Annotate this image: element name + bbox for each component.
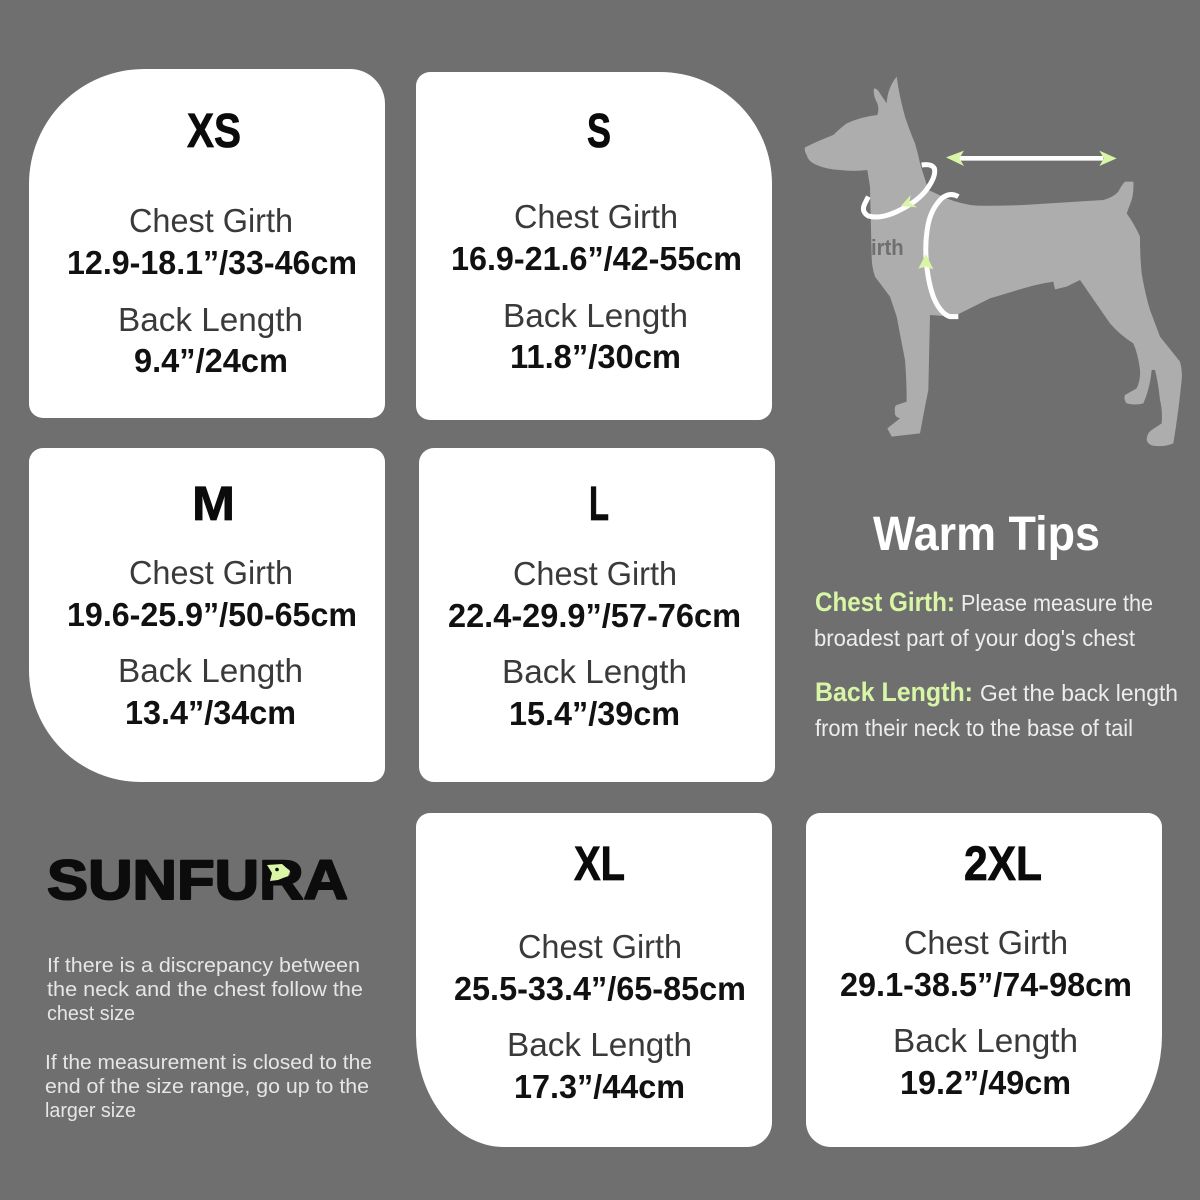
icon: neck arrow head (901, 195, 917, 207)
label: chest girth: Chest Girth (513, 555, 677, 592)
text block: back length tip: from their neck to the base of tail (815, 715, 1133, 741)
label: chest girth: Chest Girth (904, 924, 1068, 961)
label: back length: Back Length (118, 301, 303, 338)
value: back length: 13.4”/34cm (125, 694, 296, 731)
text block: size range note: larger size (45, 1099, 136, 1122)
value: chest girth: 19.6-25.9”/50-65cm (67, 596, 357, 633)
text block: discrepancy note: chest size (47, 1002, 135, 1025)
logo: sunfura: SUNFURA (47, 848, 348, 911)
panel: size XS (29, 69, 385, 418)
text block: size range note: end of the size range, go up to the (45, 1075, 369, 1098)
text block: chest girth tip: broadest part of your dog's chest (814, 625, 1136, 651)
text block: back length tip: Back Length: (815, 677, 973, 707)
icon: neck ring (863, 165, 935, 217)
label: chest girth: Chest Girth (514, 198, 678, 235)
heading: S: S (587, 105, 611, 158)
value: chest girth: 12.9-18.1”/33-46cm (67, 244, 357, 281)
heading: XL: XL (574, 838, 625, 891)
icon: chest arrow head (918, 254, 933, 269)
text block: discrepancy note: If there is a discrepancy between (47, 954, 360, 977)
label: back length: Back Length (507, 1026, 692, 1063)
panel: size XL (416, 813, 772, 1147)
dog measurement diagram (805, 77, 1182, 446)
heading: warm tips: Warm Tips (873, 508, 1100, 561)
text block: size range note: If the measurement is closed to the (45, 1051, 372, 1074)
icon: dog silhouette (805, 77, 1182, 446)
value: chest girth: 29.1-38.5”/74-98cm (840, 966, 1132, 1003)
heading: M: M (192, 478, 235, 531)
value: back length: 19.2”/49cm (900, 1064, 1071, 1101)
heading: 2XL: 2XL (964, 838, 1042, 891)
icon: logo dog head (267, 864, 290, 881)
text block: discrepancy note: the neck and the chest follow the (47, 978, 363, 1001)
panel: size 2XL (806, 813, 1162, 1147)
heading: XS: XS (187, 105, 241, 158)
text block: chest girth tip: Please measure the (961, 590, 1153, 616)
text block: chest girth tip: Chest Girth: (815, 587, 955, 617)
label: chest girth: Chest Girth (518, 928, 682, 965)
value: chest girth: 22.4-29.9”/57-76cm (448, 597, 741, 634)
text block: back length tip (815, 677, 1178, 741)
heading: L: L (589, 478, 609, 531)
value: back length: 17.3”/44cm (514, 1068, 685, 1105)
text block: back length tip: Get the back length (980, 680, 1178, 706)
text block: size range note (45, 1051, 372, 1122)
value: chest girth: 16.9-21.6”/42-55cm (451, 240, 742, 277)
value: chest girth: 25.5-33.4”/65-85cm (454, 970, 746, 1007)
value: back length: 9.4”/24cm (134, 342, 288, 379)
panel: size S (416, 72, 772, 420)
text block: discrepancy note (47, 954, 363, 1025)
label: back length: Back Length (502, 653, 687, 690)
value: back length: 11.8”/30cm (510, 338, 681, 375)
label: chest girth: Chest Girth (129, 202, 293, 239)
label: back length: Back Length (893, 1022, 1078, 1059)
text block: chest girth tip (814, 587, 1153, 651)
label: chest girth: Chest Girth (129, 554, 293, 591)
panel: size M (29, 448, 385, 782)
label: back length: Back Length (503, 297, 688, 334)
label: back length: Back Length (118, 652, 303, 689)
icon: back length arrow (946, 151, 1117, 166)
value: back length: 15.4”/39cm (509, 695, 680, 732)
icon: chest ring (926, 195, 958, 317)
panel: size L (419, 448, 775, 782)
label fragment: girth: irth (871, 235, 904, 260)
